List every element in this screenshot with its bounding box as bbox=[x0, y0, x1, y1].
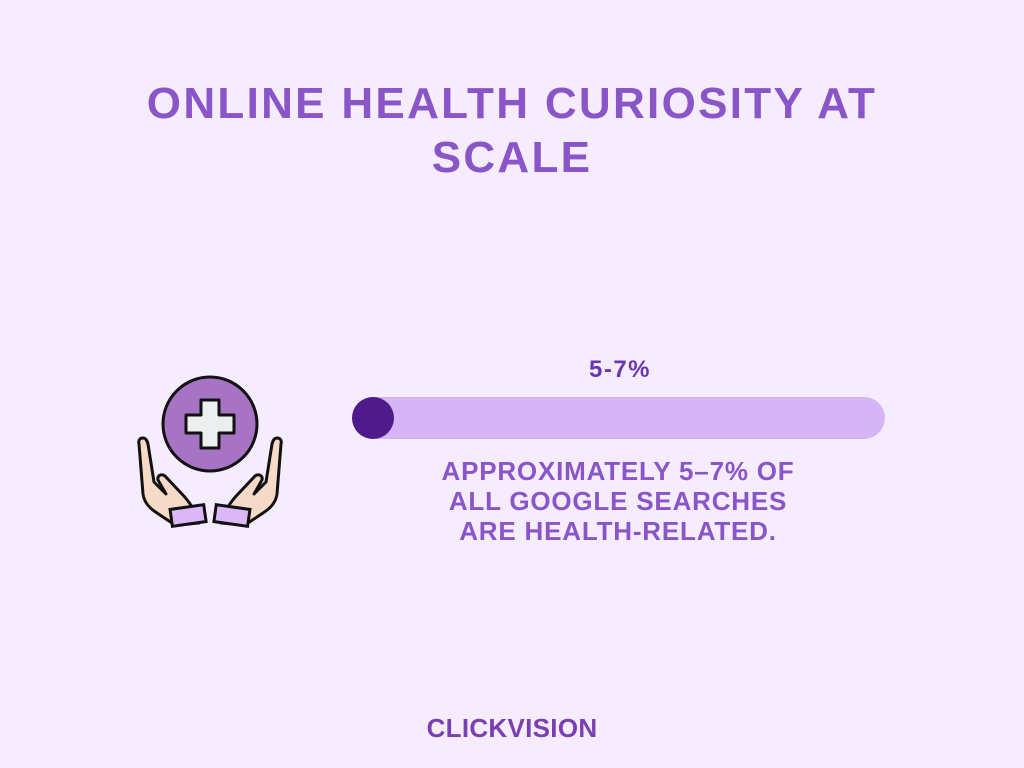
progress bar bbox=[352, 397, 885, 439]
logo: CLICKVISION bbox=[427, 713, 597, 743]
description text: ARE HEALTH-RELATED. bbox=[459, 516, 777, 546]
icon: hands holding medical cross bbox=[137, 376, 283, 528]
description text bbox=[442, 456, 794, 546]
title: SCALE bbox=[432, 133, 592, 182]
description text: APPROXIMATELY 5–7% OF bbox=[442, 456, 794, 486]
title: ONLINE HEALTH CURIOSITY AT bbox=[147, 79, 877, 128]
title bbox=[147, 79, 877, 182]
stat label: 5-7% bbox=[589, 356, 651, 383]
description text: ALL GOOGLE SEARCHES bbox=[449, 486, 787, 516]
